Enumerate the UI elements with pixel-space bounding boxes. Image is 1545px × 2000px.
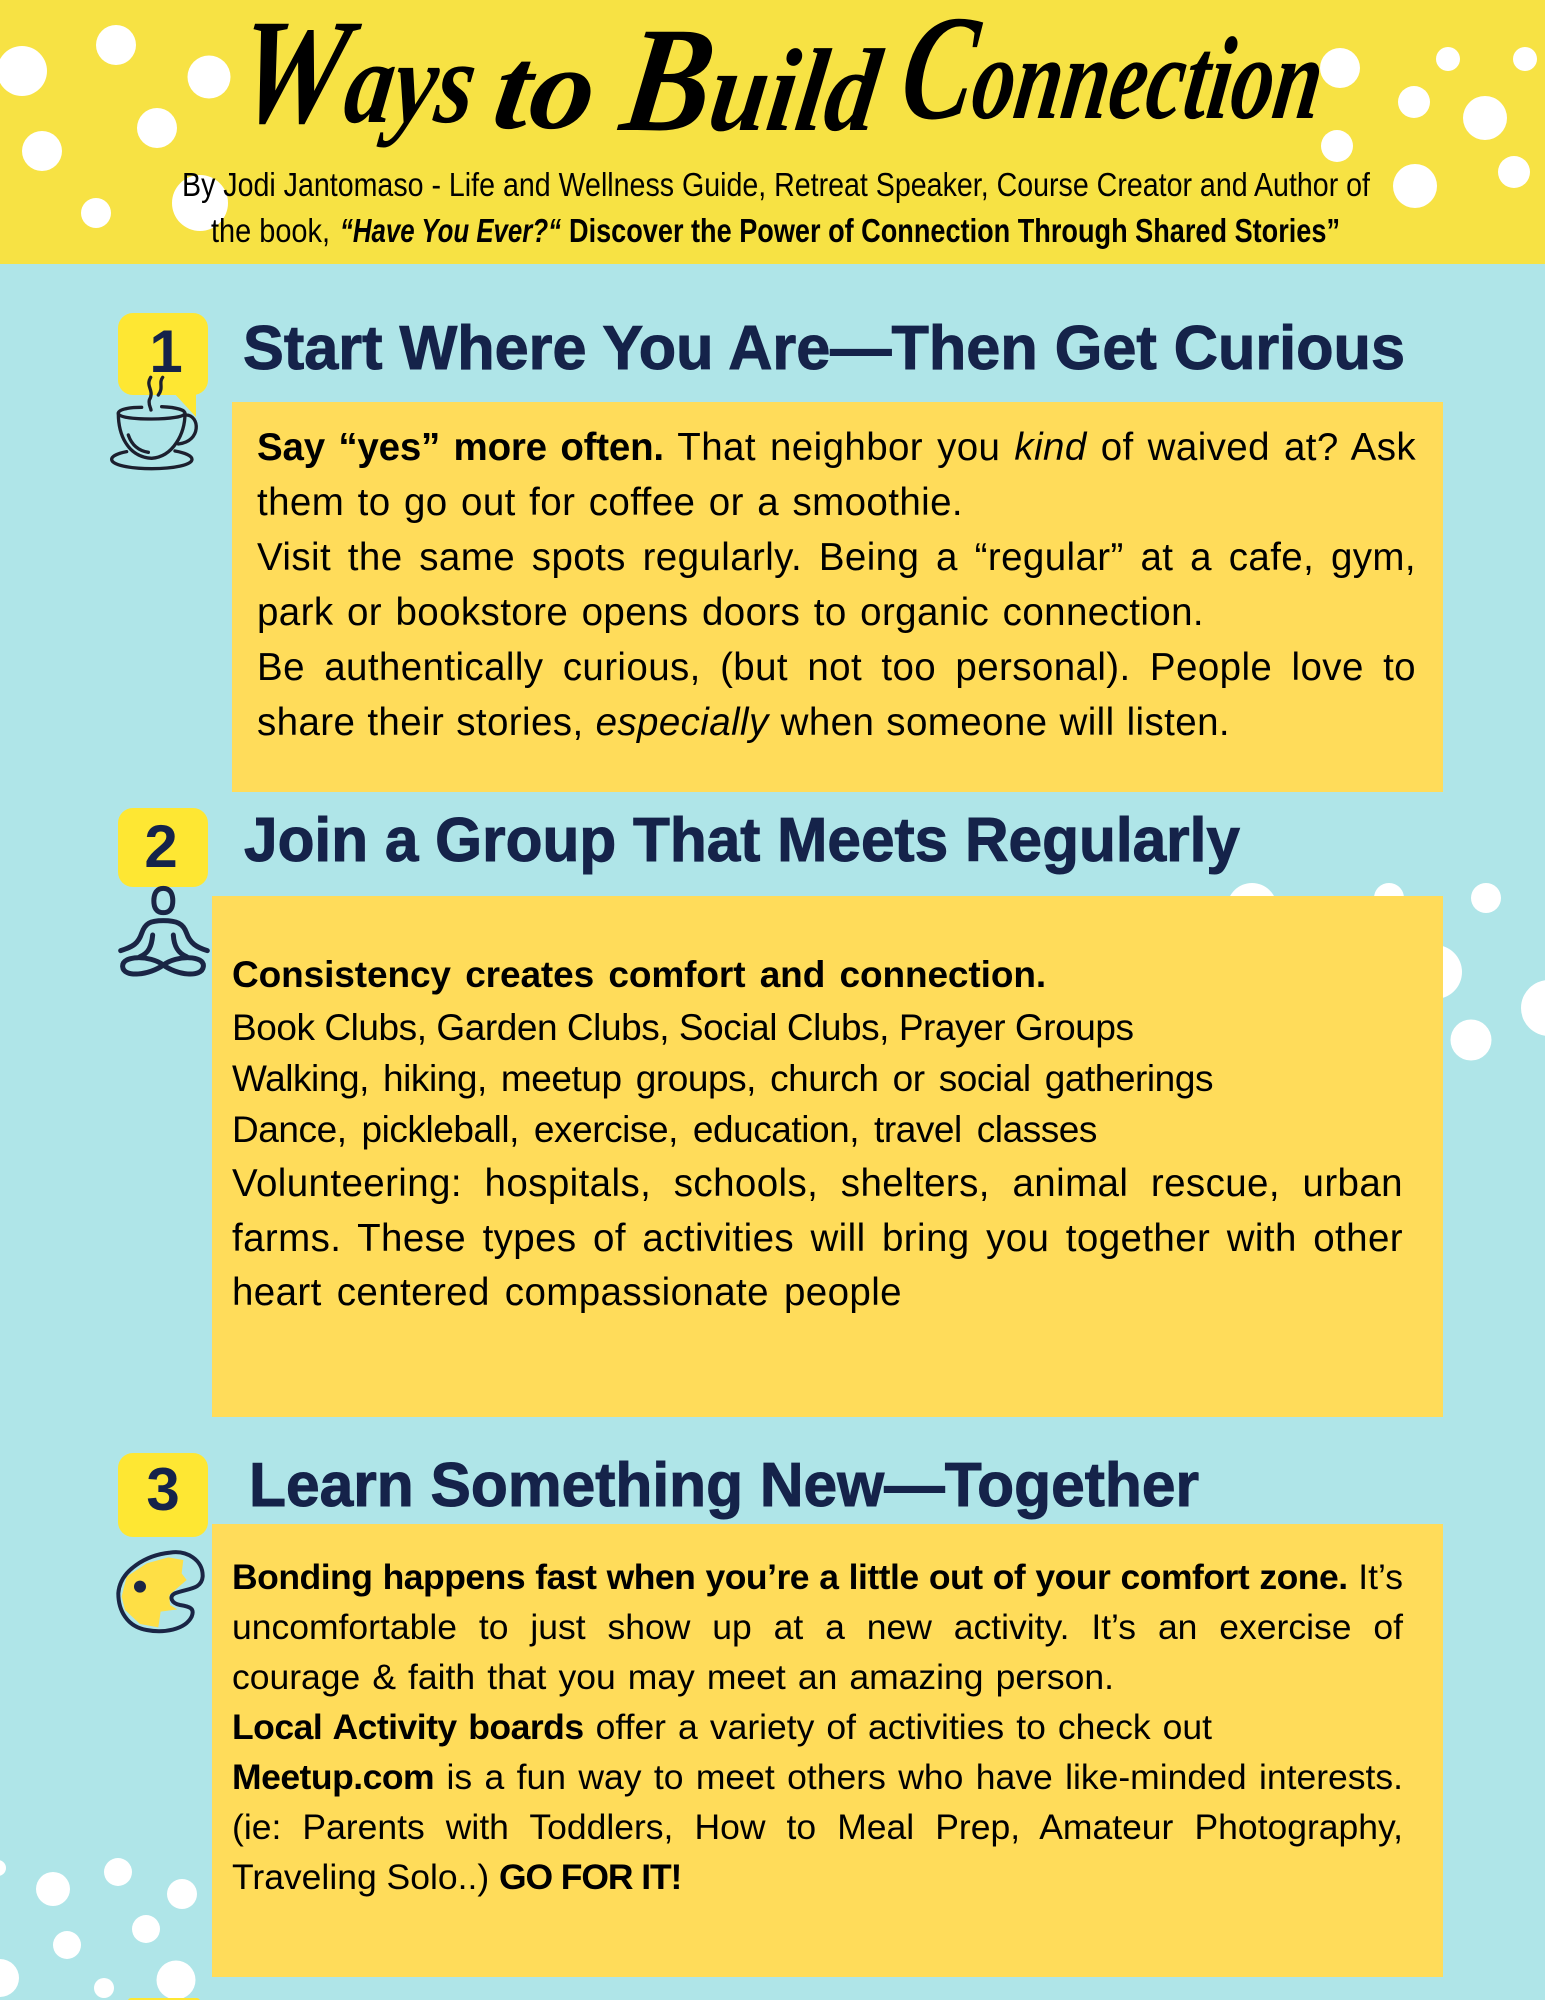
number badge 3: 3 xyxy=(146,1456,180,1523)
panel: join a group xyxy=(212,896,1443,1417)
text line: park or bookstore opens doors to organic connection. xyxy=(257,591,1204,634)
text line: uncomfortable to just show up at a new activity. It’s an exercise of xyxy=(232,1607,1403,1647)
number badge 3 xyxy=(118,1453,208,1537)
text line: Visit the same spots regularly. Being a “regular” at a cafe, gym, xyxy=(257,536,1416,579)
text line: Consistency creates comfort and connection. xyxy=(232,954,1046,995)
number badge 1: 1 xyxy=(149,318,183,385)
decorative dots bottom left xyxy=(0,1858,197,2000)
text line: Walking, hiking, meetup groups, church or social gatherings xyxy=(232,1058,1213,1099)
heading 1: Start Where You Are—Then Get Curious xyxy=(243,314,1405,383)
header band xyxy=(0,0,1545,264)
text line: Be authentically curious, (but not too personal). People love to xyxy=(257,646,1416,689)
heading 2: Join a Group That Meets Regularly xyxy=(244,806,1240,875)
text line: heart centered compassionate people xyxy=(232,1271,902,1314)
panel: start where you are xyxy=(232,402,1443,792)
text line: farms. These types of activities will bring you together with other xyxy=(232,1217,1403,1260)
icon: meditating person xyxy=(121,888,207,974)
panel: learn something new xyxy=(212,1524,1443,1977)
title xyxy=(227,0,1336,163)
subtitle: “Have You Ever?“ xyxy=(340,212,561,249)
number badge 1 xyxy=(118,313,208,417)
text line: courage & faith that you may meet an amazing person. xyxy=(232,1657,1114,1697)
decorative dots right xyxy=(1227,883,1545,1060)
text line: Bonding happens fast when you’re a little out of your comfort zone. It’s xyxy=(232,1557,1403,1597)
text line: (ie: Parents with Toddlers, How to Meal Prep, Amateur Photography, xyxy=(232,1807,1403,1847)
subtitle xyxy=(182,166,1371,249)
heading 3: Learn Something New—Together xyxy=(249,1451,1199,1520)
text line: them to go out for coffee or a smoothie. xyxy=(257,481,963,524)
subtitle: the book, xyxy=(211,212,330,249)
text line: Volunteering: hospitals, schools, shelters, animal rescue, urban xyxy=(232,1162,1403,1205)
number badge 2: 2 xyxy=(144,813,178,880)
text line: Say “yes” more often. That neighbor you kind of waived at? Ask xyxy=(257,426,1416,469)
text line: Traveling Solo..) GO FOR IT! xyxy=(232,1857,681,1897)
subtitle: By Jodi Jantomaso - Life and Wellness Guide, Retreat Speaker, Course Creator and Author of xyxy=(182,166,1371,203)
icon: coffee cup xyxy=(112,377,196,469)
subtitle: Discover the Power of Connection Through Shared Stories” xyxy=(569,212,1340,249)
text line: Meetup.com is a fun way to meet others who have like-minded interests. xyxy=(232,1757,1403,1797)
title: to xyxy=(486,23,605,154)
number badge 4 peeking at page bottom xyxy=(128,1998,200,2000)
text line: share their stories, especially when someone will listen. xyxy=(257,701,1230,744)
title: Build xyxy=(612,0,893,163)
text line: Local Activity boards offer a variety of activities to check out xyxy=(232,1707,1212,1747)
icon: paint palette xyxy=(118,1552,203,1631)
text line: Dance, pickleball, exercise, education, travel classes xyxy=(232,1109,1097,1150)
text line: Book Clubs, Garden Clubs, Social Clubs, Prayer Groups xyxy=(232,1007,1134,1048)
number badge 2 xyxy=(118,808,208,887)
